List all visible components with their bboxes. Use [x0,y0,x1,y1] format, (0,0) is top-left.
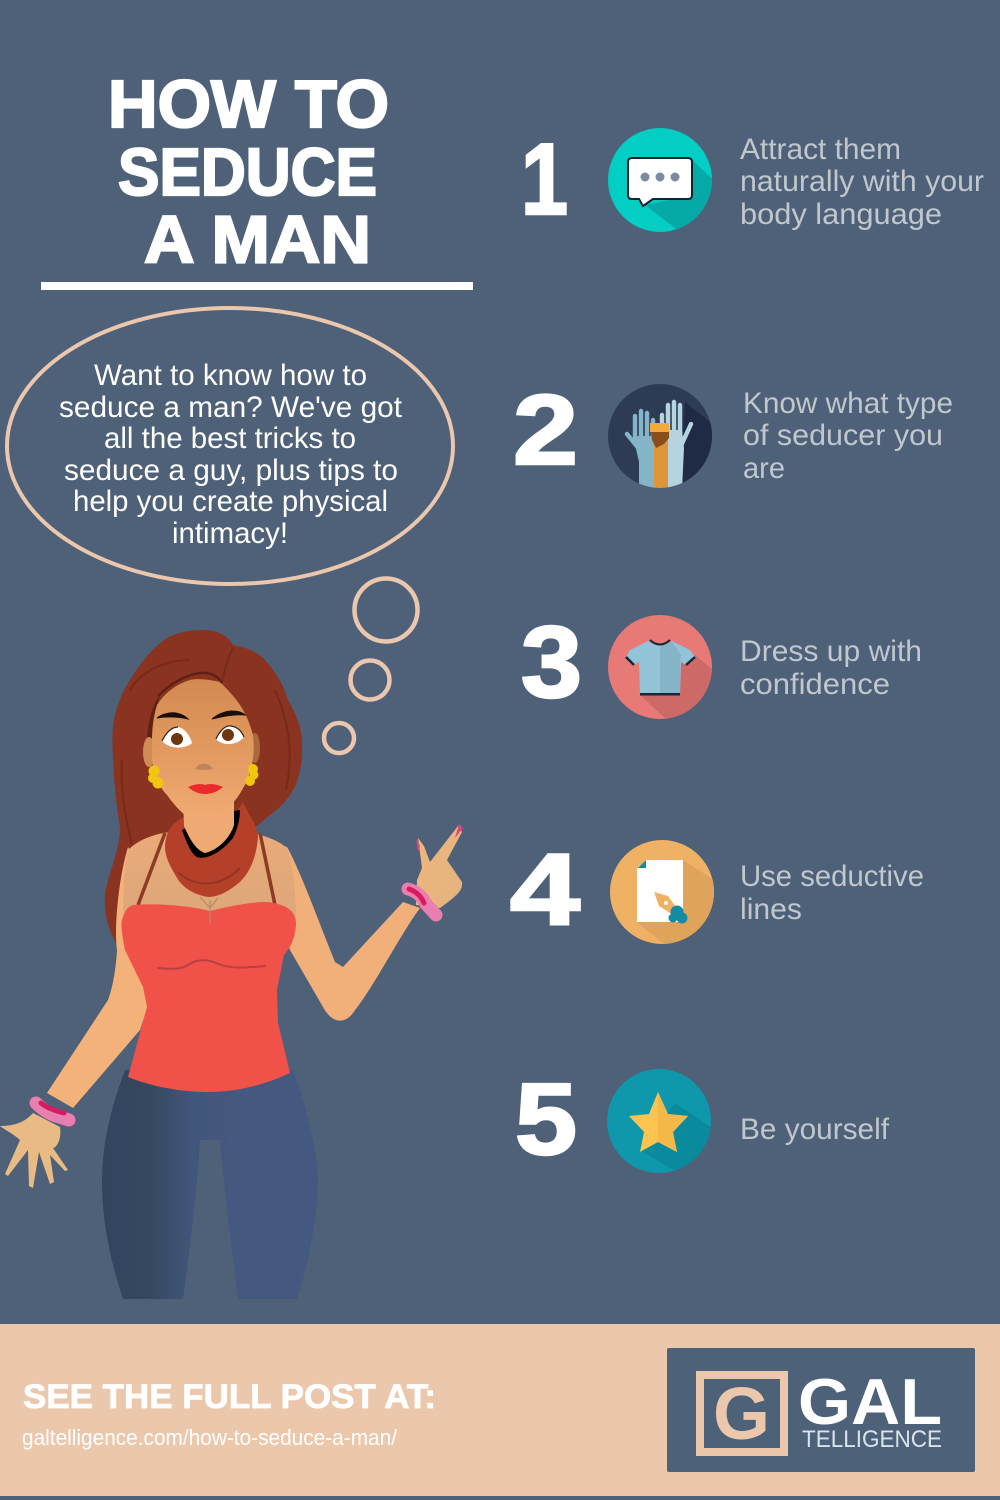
hair strands [122,647,290,845]
fringe shadow [158,673,222,696]
step 4 text: Use seductive [740,860,924,893]
pointing hand [416,826,462,908]
logo [667,1348,975,1472]
ears [143,737,155,767]
dark hair by temple [147,695,160,745]
step 3 text: Dress up with [740,635,922,668]
brows [157,711,245,719]
thought bubbles trail [324,578,418,753]
icon: speech bubble [608,128,712,232]
nose [195,764,213,770]
chest [123,832,296,920]
eyelids [162,726,244,741]
thought bubble with intro text: seduce a man? We've got [59,391,403,424]
thought bubble with intro text: all the best tricks to [104,422,356,455]
thought bubble with intro text: intimacy! [172,517,288,550]
thought bubble with intro text: Want to know how to [94,359,367,392]
logo: GAL [798,1365,942,1438]
irises [171,733,183,745]
step 2 [516,384,952,488]
footer banner [0,1324,1000,1496]
scarf [165,802,258,897]
step 1 text: Attract them [740,133,901,166]
step 3 [522,615,920,719]
viewer-left arm [47,847,160,1108]
thought bubble with intro text: seduce a guy, plus tips to [64,454,398,487]
footer url: galtelligence.com/how-to-seduce-a-man/ [22,1425,398,1450]
lips [188,784,223,794]
logo: TELLIGENCE [802,1426,942,1453]
thought bubble with intro text [7,308,453,584]
title: HOW TO [108,67,389,142]
title underline [41,282,473,290]
step 2 text [743,387,953,485]
step 4 text: lines [740,893,802,926]
title: SEDUCE [118,135,377,210]
number 3: 3 [521,607,582,719]
face [152,679,254,822]
step 4 text [740,860,924,926]
step 3 text [740,635,922,701]
number 4: 4 [510,834,580,946]
number 5: 5 [515,1064,577,1176]
icon: shirt [608,615,712,719]
step 2 text: Know what type [743,387,953,420]
open hand [0,1113,68,1188]
logo: G [713,1372,770,1455]
neck [183,795,234,853]
step 2 text: are [743,452,785,485]
straps [138,833,275,905]
footer heading: SEE THE FULL POST AT: [23,1378,436,1416]
eye whites [162,726,244,748]
step 5 [516,1069,890,1173]
title: A MAN [144,202,371,278]
number 2: 2 [513,374,578,485]
step 3 text: confidence [740,668,890,701]
icon: paper and pen [610,840,714,944]
icon: raised hands [608,384,720,490]
illustration: woman pointing [0,630,463,1299]
step 1 text: body language [740,198,942,231]
icon: star [607,1069,715,1180]
scrunchie right wrist [408,889,436,915]
thought bubble with intro text: help you create physical [73,485,388,518]
step 2 text: of seducer you [743,419,943,452]
hair [105,630,302,945]
number 1: 1 [521,124,568,236]
step 1 text: naturally with your [740,165,984,198]
step 1 [525,128,984,232]
legs [102,1070,318,1299]
viewer-right arm [262,838,420,1021]
title [108,67,389,278]
scrunchie left wrist [36,1103,69,1120]
top [122,902,296,1092]
step 4 [510,840,923,944]
earrings [148,764,258,788]
step 5 text: Be yourself [740,1113,890,1146]
step 1 text [740,133,984,231]
